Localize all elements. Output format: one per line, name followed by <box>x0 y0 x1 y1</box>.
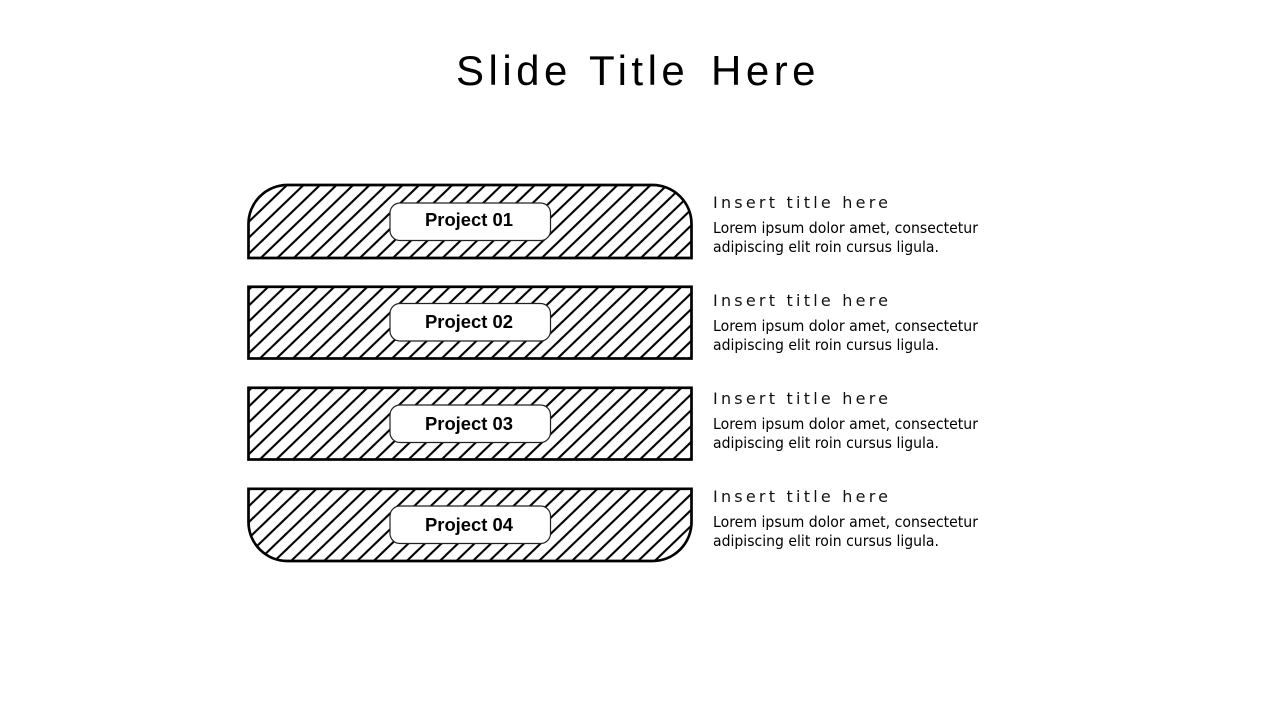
text block 02: Lorem ipsum dolor amet, consectetur <box>713 317 979 335</box>
label: project 03 <box>390 405 550 442</box>
hatched bar 01 <box>248 185 692 258</box>
text block 01: Lorem ipsum dolor amet, consectetur <box>713 219 979 237</box>
text block 02: Insert title here <box>713 291 888 310</box>
title: Here <box>711 47 820 94</box>
label: project 01: Project 01 <box>425 209 513 230</box>
hatched bar 04 <box>248 489 692 561</box>
text block 04: Insert title here <box>713 487 888 506</box>
text block 02 <box>713 291 979 354</box>
hatched bar 03 <box>248 388 692 460</box>
text block 03: Lorem ipsum dolor amet, consectetur <box>713 415 979 433</box>
text block 03: adipiscing elit roin cursus ligula. <box>713 434 939 452</box>
text block 03 <box>713 389 979 452</box>
text block 01: adipiscing elit roin cursus ligula. <box>713 238 939 256</box>
text block 03: Insert title here <box>713 389 888 408</box>
hatched bar 02 <box>248 287 692 358</box>
title: Title <box>589 47 689 94</box>
label: project 04 <box>390 506 550 544</box>
label: project 01 <box>390 203 550 240</box>
text block 04: adipiscing elit roin cursus ligula. <box>713 532 939 550</box>
panel: project 02 <box>248 287 692 358</box>
panel: project 04 <box>248 489 692 561</box>
panel: project 01 <box>248 185 692 258</box>
panel: project 03 <box>248 388 692 460</box>
label: project 02 <box>390 304 550 341</box>
label: project 04: Project 04 <box>425 514 514 535</box>
label: project 03: Project 03 <box>425 413 513 434</box>
title <box>456 47 820 94</box>
text block 04: Lorem ipsum dolor amet, consectetur <box>713 513 979 531</box>
title: Slide <box>456 47 572 94</box>
text block 02: adipiscing elit roin cursus ligula. <box>713 336 939 354</box>
text block 04 <box>713 487 979 550</box>
text block 01: Insert title here <box>713 193 888 212</box>
label: project 02: Project 02 <box>425 311 513 332</box>
text block 01 <box>713 193 979 256</box>
